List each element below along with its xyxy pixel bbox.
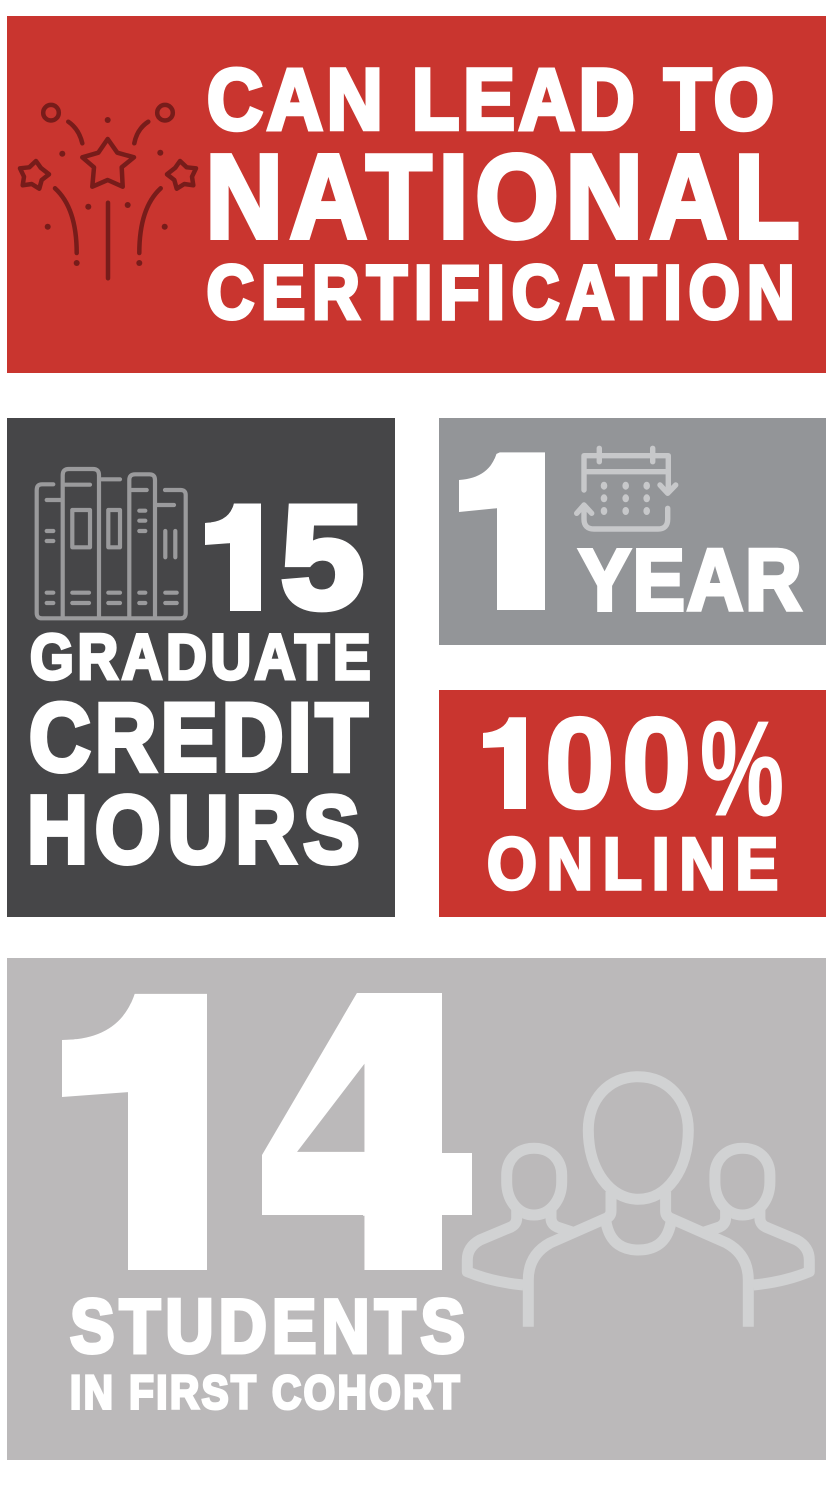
label: graduate: GRADUATE — [30, 621, 371, 693]
number: 100%: 00 — [545, 692, 692, 836]
number: 100%: 1 — [471, 692, 551, 836]
number: 15: 1 — [190, 475, 291, 639]
heading: national: NATIONAL — [206, 130, 800, 263]
label: online: ONLINE — [487, 823, 778, 905]
panel: credit hours — [7, 418, 395, 917]
panel: national certification — [7, 16, 826, 373]
heading: certification: CERTIFICATION — [206, 251, 795, 336]
label: hours: HOURS — [27, 777, 360, 884]
panel: one year — [427, 409, 826, 653]
panel: students — [7, 958, 826, 1460]
number: 14: 4 — [212, 877, 493, 1357]
number: 1 — [459, 452, 545, 610]
icon: books — [37, 469, 186, 618]
icon: three people — [467, 1077, 809, 1327]
panel: fully online — [439, 690, 826, 917]
number: 14 — [62, 993, 472, 1270]
number: 1: 1 — [427, 409, 598, 653]
icon: fireworks — [20, 105, 196, 278]
number: 100%: % — [700, 693, 784, 844]
label: credit: CREDIT — [29, 683, 368, 792]
label: year: YEAR — [578, 531, 802, 629]
icon: calendar — [577, 448, 676, 529]
number: 100% — [483, 716, 782, 816]
heading: can lead to: CAN LEAD TO — [207, 52, 774, 148]
label: students: STUDENTS — [70, 1285, 465, 1369]
number: 15: 5 — [281, 477, 364, 639]
number: 14: 1 — [18, 918, 290, 1344]
label: in first cohort: IN FIRST COHORT — [70, 1367, 460, 1419]
number: 15 — [205, 504, 364, 612]
